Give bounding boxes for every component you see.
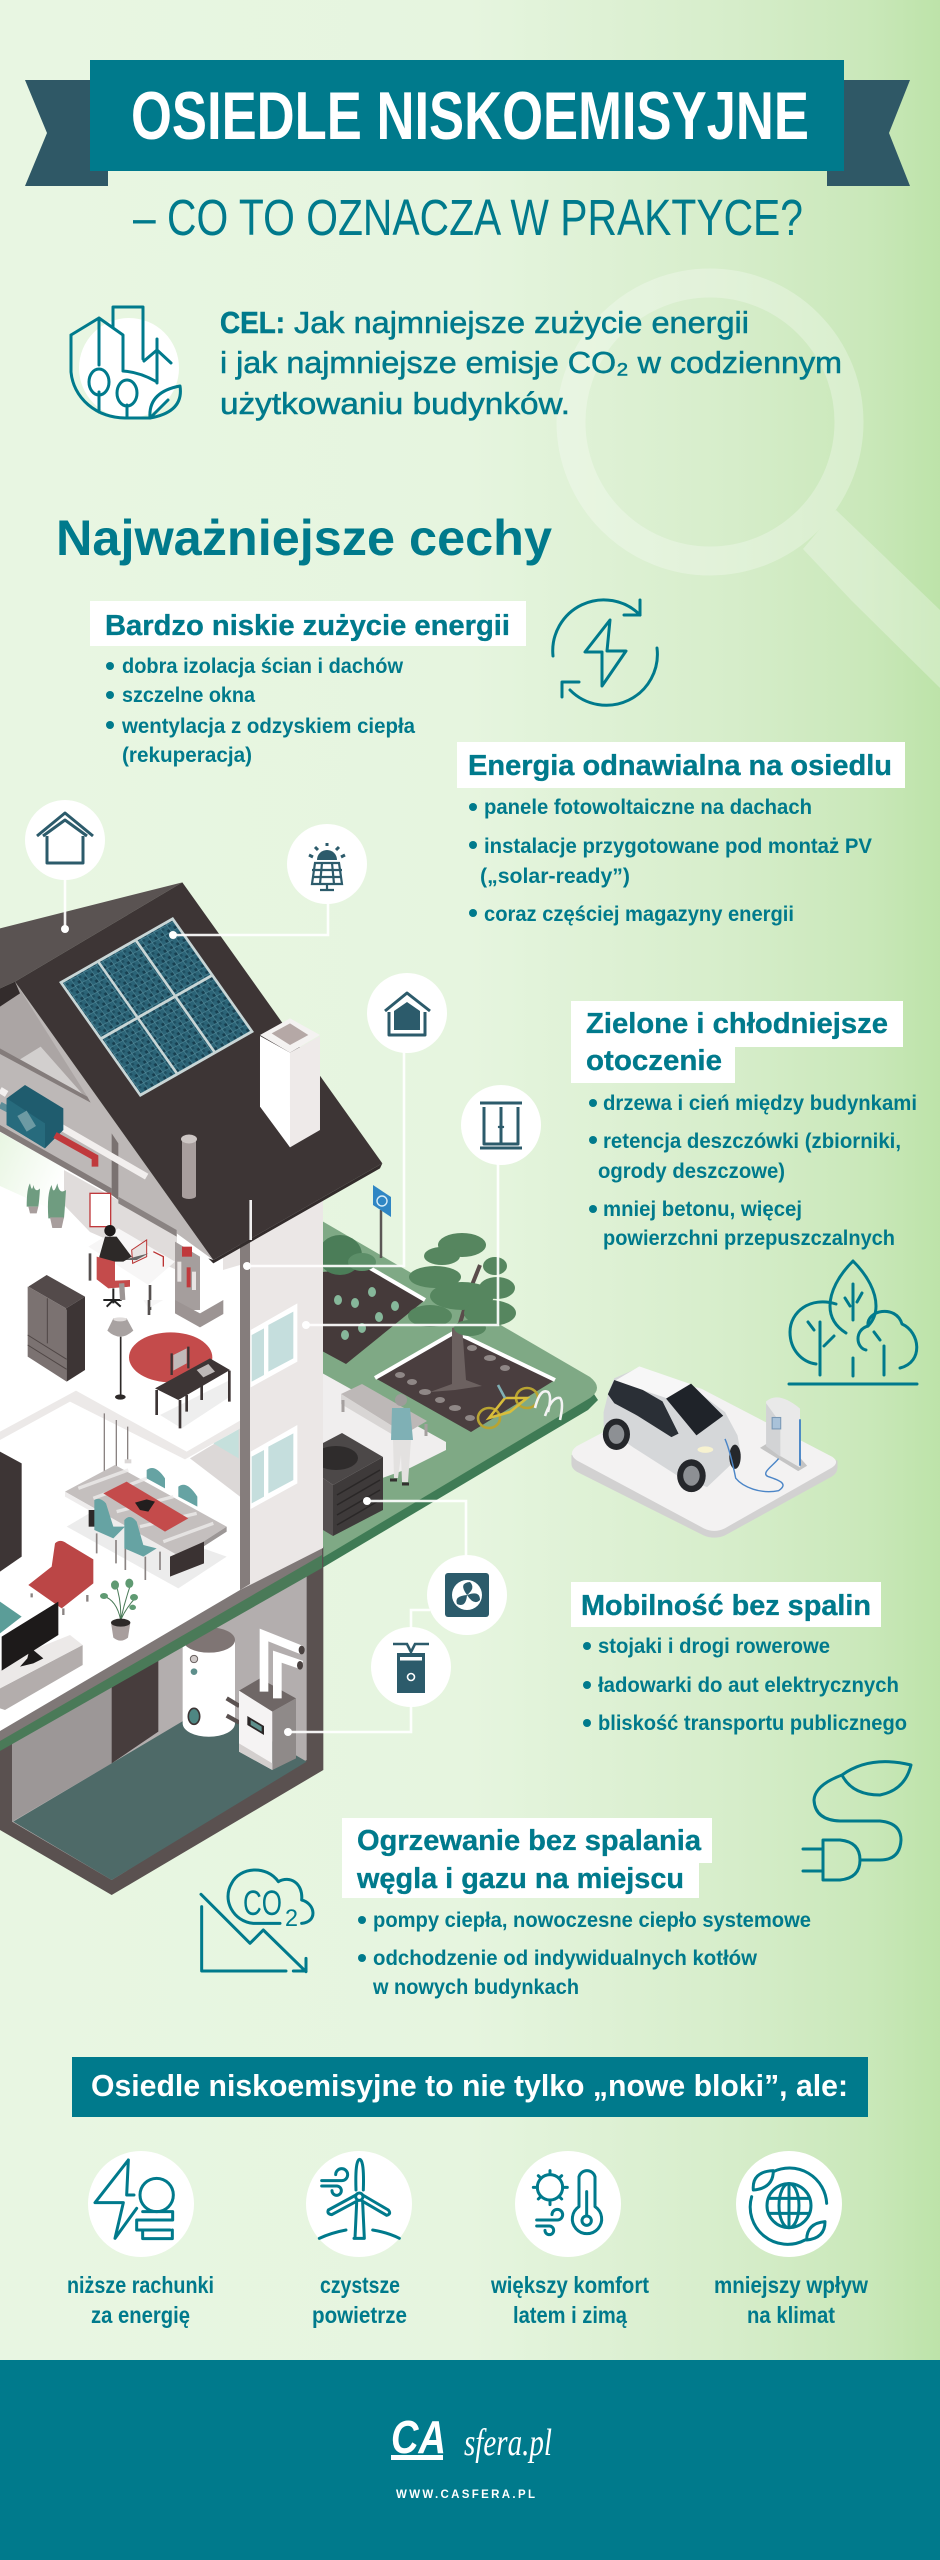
person: [390, 1394, 413, 1484]
logo: [391, 2411, 552, 2464]
panel: mobility: Mobilność bez spalin: [581, 1590, 871, 1622]
garden lawn: [318, 1221, 598, 1568]
icon: CO2 reduction: [201, 1870, 313, 1972]
interior floor: [0, 1130, 240, 1731]
icon circle: fan: [427, 1555, 507, 1635]
heat pump unit: [314, 1433, 383, 1536]
panel: heating: [342, 1818, 811, 1999]
goal text: CEL:: [220, 305, 285, 340]
bike and rack: [478, 1385, 562, 1428]
floor slab: [0, 1548, 322, 1751]
benefit: lower climate impact: [714, 2151, 868, 2328]
benefit: lower bills: [67, 2151, 214, 2328]
benefits banner: [72, 2057, 868, 2117]
attic section: [0, 982, 213, 1260]
wall windows: [251, 1303, 297, 1509]
chimney: [260, 1018, 320, 1147]
panel: mobility: ładowarki do aut elektrycznych: [598, 1674, 899, 1697]
icon: energy cycle: [553, 600, 657, 705]
building wall: [223, 1170, 323, 1590]
logo: sfera.pl: [464, 2422, 552, 2464]
benefit: greater comfort: [490, 2151, 649, 2328]
bike sign: [373, 1185, 391, 1258]
goal text: [220, 305, 842, 421]
logo: CA: [391, 2411, 446, 2463]
icon circle: filled house: [367, 973, 447, 1053]
panel: mobility: stojaki i drogi rowerowe: [598, 1635, 830, 1658]
basement: [0, 1547, 323, 1895]
panel: green surroundings: [571, 1001, 917, 1250]
office corner: [28, 1225, 200, 1310]
icon: city with trees and leaf: [71, 307, 180, 418]
bench: [341, 1384, 427, 1442]
benefit: cleaner air: czystsze: [320, 2272, 400, 2298]
panel: renewable energy: coraz częściej magazyny energii: [484, 903, 794, 926]
illustration: cut-away house: [0, 800, 837, 1895]
panel: green surroundings: mniej betonu, więcej: [603, 1198, 802, 1221]
benefit: lower climate impact: na klimat: [747, 2302, 835, 2328]
solar panels: [59, 917, 254, 1097]
icon: plug with leaf: [803, 1762, 911, 1880]
panel: green surroundings: powierzchni przepuszczalnych: [603, 1227, 895, 1250]
benefit: greater comfort: większy komfort: [490, 2272, 649, 2298]
panel: low energy use: wentylacja z odzyskiem ciepła: [121, 715, 415, 738]
icon circle: house outline: [25, 800, 105, 880]
icon: CO2 reduction: 2: [285, 1905, 298, 1932]
panel: heating: Ogrzewanie bez spalania: [357, 1825, 702, 1857]
vent pipe: [181, 1134, 197, 1199]
panel: low energy use: dobra izolacja ścian i dachów: [122, 655, 404, 678]
panel: renewable energy: („solar-ready”): [480, 865, 630, 888]
icon: trees: [789, 1261, 917, 1384]
goal text: Jak najmniejsze zużycie energii: [294, 305, 749, 340]
roof: [0, 882, 382, 1263]
panel: renewable energy: Energia odnawialna na osiedlu: [468, 750, 892, 782]
website: WWW.CASFERA.PL: [396, 2489, 535, 2501]
panel: low energy use: Bardzo niskie zużycie energii: [105, 610, 510, 642]
benefits banner: Osiedle niskoemisyjne to nie tylko „nowe bloki”, ale:: [91, 2068, 848, 2103]
footer: [0, 2360, 940, 2560]
panel: renewable energy: [457, 742, 905, 926]
benefit: greater comfort: latem i zimą: [513, 2302, 627, 2328]
goal text: i jak najmniejsze emisje CO₂ w codziennym: [220, 345, 842, 380]
panel: mobility: [571, 1582, 907, 1735]
panel: heating: w nowych budynkach: [372, 1976, 579, 1999]
panel: low energy use: szczelne okna: [122, 684, 255, 707]
panel: mobility: bliskość transportu publicznego: [598, 1712, 907, 1735]
panel: green surroundings: otoczenie: [586, 1045, 722, 1077]
benefit: lower climate impact: mniejszy wpływ: [714, 2272, 868, 2298]
benefit: cleaner air: powietrze: [312, 2302, 407, 2328]
goal text: użytkowaniu budynków.: [220, 386, 570, 421]
panel: renewable energy: instalacje przygotowane pod montaż PV: [484, 835, 872, 858]
icon circle: boiler: [371, 1627, 451, 1707]
benefit: cleaner air: [306, 2151, 412, 2328]
icon circle: solar panel: [287, 824, 367, 904]
panel: low energy use: (rekuperacja): [122, 744, 252, 767]
panel: green surroundings: drzewa i cień między budynkami: [603, 1092, 917, 1115]
panel: low energy use: [90, 601, 526, 767]
panel: heating: węgla i gazu na miejscu: [356, 1863, 684, 1895]
panel: renewable energy: panele fotowoltaiczne na dachach: [484, 796, 812, 819]
benefit: lower bills: niższe rachunki: [67, 2272, 214, 2298]
panel: heating: pompy ciepła, nowoczesne ciepło systemowe: [373, 1909, 811, 1932]
magnifying glass watermark: [571, 283, 940, 688]
electric car on pad: [571, 1366, 837, 1538]
panel: heating: odchodzenie od indywidualnych kotłów: [373, 1947, 758, 1970]
section heading: Najważniejsze cechy: [56, 510, 552, 566]
icon: CO2 reduction: CO: [243, 1884, 282, 1923]
connector lines and dots: [61, 878, 498, 1736]
panel: green surroundings: retencja deszczówki (zbiorniki,: [603, 1130, 901, 1153]
living floor furniture: [0, 1287, 240, 1710]
benefit: lower bills: za energię: [91, 2302, 190, 2328]
tree: [408, 1233, 516, 1392]
panel: green surroundings: ogrody deszczowe): [598, 1160, 785, 1183]
panel: green surroundings: Zielone i chłodniejsze: [586, 1008, 888, 1040]
title banner: [25, 60, 910, 186]
icon circle: window: [461, 1085, 541, 1165]
